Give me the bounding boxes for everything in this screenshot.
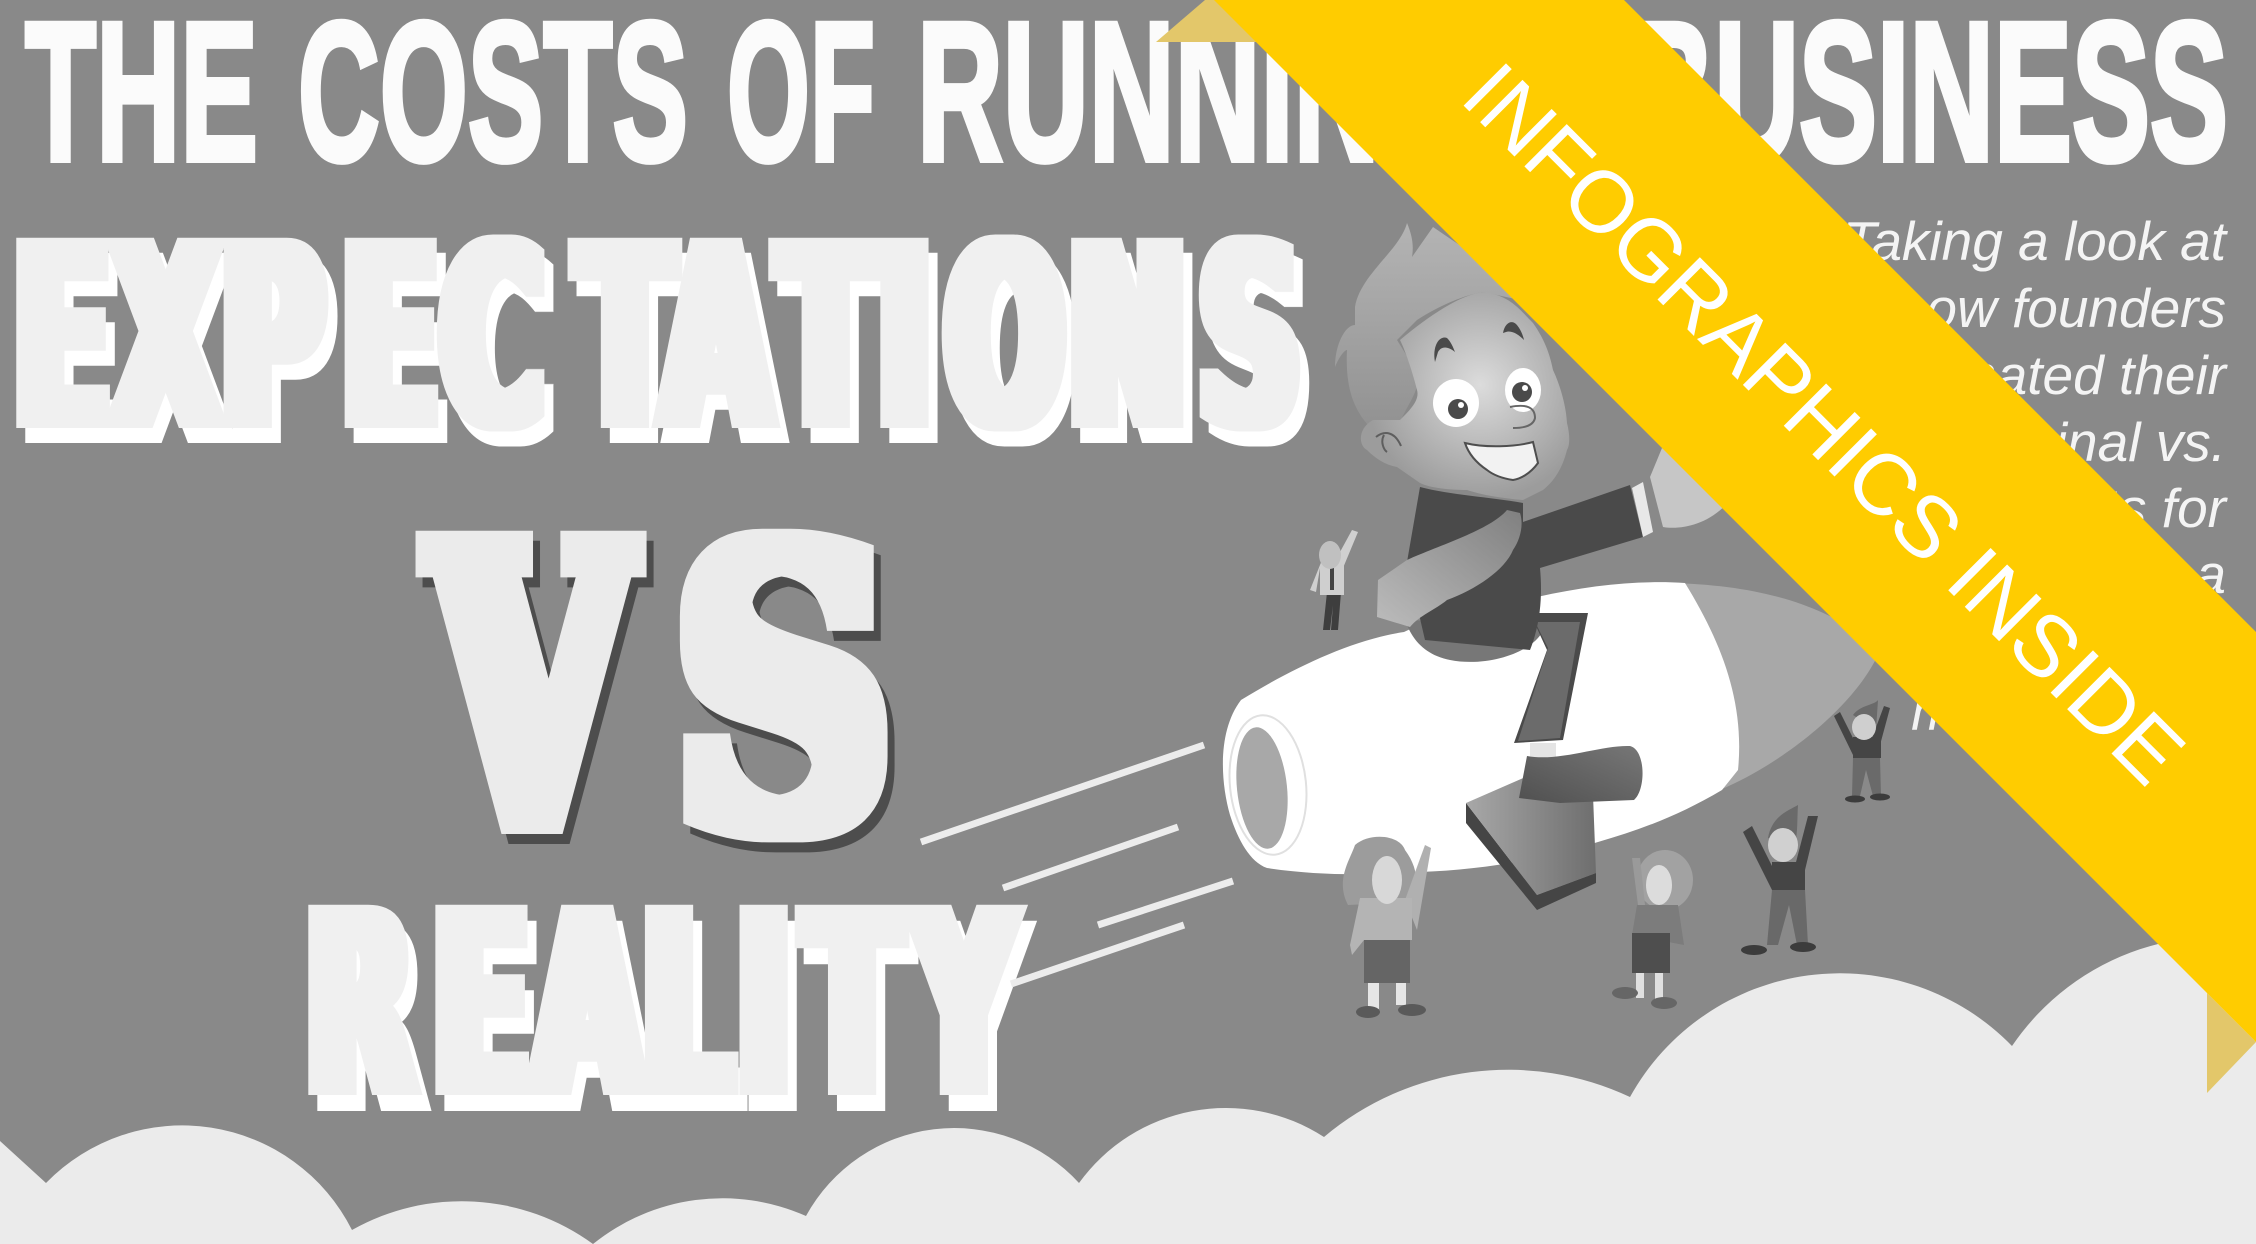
- sock: [1530, 743, 1556, 761]
- ribbon fold: top left: [1156, 0, 1262, 42]
- left eye: [1433, 379, 1479, 427]
- nozzle rim: [1223, 711, 1313, 859]
- character: founder on rocket: [1335, 223, 1730, 803]
- nozzle opening: [1231, 725, 1293, 851]
- right eye: [1505, 368, 1541, 412]
- rocket: [1223, 582, 1880, 910]
- intro paragraph: actual costs for: [1856, 477, 2229, 539]
- heading: vs: [429, 463, 899, 926]
- person: man cheering: [1741, 805, 1818, 955]
- person: man cheering far: [1834, 700, 1890, 802]
- intro paragraph: original vs.: [1963, 411, 2226, 473]
- hair: [1335, 223, 1540, 425]
- person: man waving top left: [1310, 530, 1358, 630]
- intro paragraph: how founders: [1896, 277, 2226, 339]
- heading: reality: REALITY: [316, 875, 1025, 1166]
- intro paragraph: Taking a look at: [1843, 210, 2229, 272]
- title: [25, 0, 2228, 202]
- ribbon banner: [1214, 0, 2256, 1042]
- intro paragraph: much money: [1911, 680, 2229, 742]
- hand: [1650, 448, 1730, 528]
- heading: vs: V: [429, 463, 632, 913]
- eyebrows: [1434, 322, 1524, 362]
- jacket: [1407, 485, 1643, 650]
- person: woman waving: [1612, 850, 1693, 1009]
- intro paragraph: estimated their: [1865, 344, 2229, 406]
- mouth: [1465, 442, 1538, 480]
- ribbon fold: right: [2207, 993, 2256, 1093]
- intro paragraph: [1843, 210, 2229, 742]
- clouds: [0, 936, 2256, 1244]
- nose: [1510, 406, 1535, 428]
- heading: reality: REALITY: [307, 859, 1016, 1150]
- intro paragraph: business and: [1902, 610, 2228, 672]
- ear curl: [1376, 433, 1401, 452]
- heading: vs: S: [681, 476, 899, 926]
- heading: vs: V: [436, 473, 639, 923]
- rocket fin: [1466, 775, 1596, 910]
- rocket nose: [1670, 583, 1880, 790]
- shin: [1514, 613, 1588, 743]
- intro paragraph: running a: [1997, 543, 2226, 605]
- rocket body: [1223, 582, 1739, 874]
- heading: expectations: EXPECTATIONS: [15, 192, 1299, 483]
- heading: expectations: EXPECTATIONS: [24, 207, 1308, 498]
- person: woman with long hair: [1343, 837, 1431, 1018]
- tie: [1377, 510, 1522, 627]
- speed lines: [921, 745, 1233, 984]
- heading: vs: S: [674, 466, 892, 916]
- cuff: [1632, 482, 1653, 537]
- head: [1361, 292, 1569, 500]
- ribbon label: INFOGRAPHICS INSIDE: [1445, 45, 2203, 803]
- thigh: [1405, 620, 1545, 662]
- shoe: [1519, 746, 1643, 803]
